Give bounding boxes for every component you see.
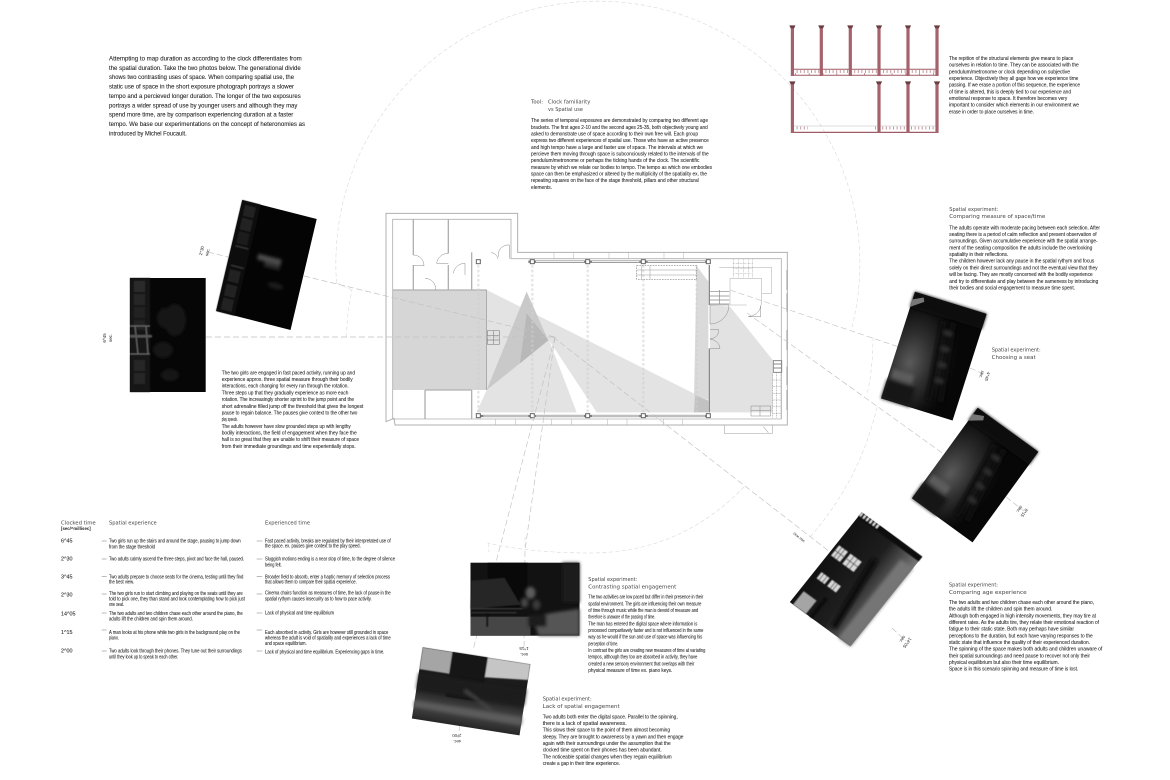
row: 14^05: Lack of physical and time equilibrium: [265, 610, 334, 616]
intro text block: the spatial duration. Take the two photos below. The generational divide: [109, 65, 301, 72]
row: 2^30 adults: being felt.: [265, 563, 282, 569]
row: 14^05: adults lift the children and spin them around.: [109, 616, 193, 622]
experiment text: lack of spatial engagement: there is a lack of spatial awareness.: [543, 721, 627, 727]
photo: 4^45 cinema seats: [881, 292, 987, 421]
row: 3^45: Broader field to absorb, enter a haptic memory of selection process: [265, 574, 390, 580]
experiment text: comparing age experience: different rates. As the adults tire, they relate their emotional reaction of: [949, 620, 1099, 626]
row: 1^15: Each absorbed in activity. Girls are however still grounded in space: [265, 630, 388, 636]
experiment text: lack of spatial engagement: clocked time spent on their phones has been abundant.: [543, 748, 662, 754]
experiment text: contrasting spatial engagement: way as he would if the sun and use of space was influencing his: [588, 635, 703, 641]
label: 2^00 sec: [452, 733, 462, 744]
floor plan: [386, 213, 787, 433]
experiment text: comparing measure of space/time: will be facing. They are mostly concerned with the bodily experience: [948, 272, 1093, 278]
label: 4^45 sec: sec.: [978, 370, 985, 379]
label: 6^45 sec: [102, 333, 113, 343]
experiment text: fast paced girls and slow adults: experience approx. three spatial measure through their bodily: [222, 377, 353, 383]
experiment text: fast paced girls and slow adults: play speeds.: [222, 417, 238, 423]
tool text block: repeating squares on the face of the stage threshold, pillars and other structural: [531, 178, 699, 184]
label: 8^15 sec: sec.: [1015, 505, 1024, 514]
label: 2^30 sec: sec.: [204, 248, 211, 257]
label: 1^15 sec: 1^15: [519, 646, 529, 651]
table: clocked time, spatial experience, experienced time: [61, 520, 395, 660]
experiment text: lack of spatial engagement: Lack of spatial engagement: [543, 704, 620, 710]
row: 6^45: from the stage threshold: [109, 544, 155, 550]
label: 14^05 sec: [897, 633, 913, 650]
tool text block: Tool:: [530, 100, 543, 106]
experiment text: comparing measure of space/time: spatiality in their reflections.: [949, 252, 1008, 258]
tool text block: percieve them moving through space is subconciously related to the intervals of the: [531, 152, 709, 158]
row: 2^30 adults: Sluggish motions ending is a near stop of time, to the degree of silence: [265, 557, 395, 563]
experiment text: lack of spatial engagement: This slows their space to the point of them almost becoming: [543, 728, 670, 734]
photo: 6^45 stage threshold: [130, 278, 206, 392]
experiment text: fast paced girls and slow adults: interactions, each changing for every run through the rotation.: [222, 384, 349, 390]
structural elements text block: passing. If we erase a portion of this sequence, the experience: [949, 83, 1080, 89]
label: 1^15 sec: [519, 646, 529, 657]
row: 2^30 girls: told to pick one, they than stand and look contemplating how to pick just: [109, 597, 245, 603]
row: 3^45: that allows them to compare their spatial experience.: [265, 580, 357, 586]
experiment text: contrasting spatial engagement: The two activities are low paced but differ in their presence in their: [588, 595, 703, 601]
experiment text: fast paced girls and slow adults: rotation. The increasingly shorter sprint to the jump point and the: [222, 397, 354, 403]
experiment text: comparing age experience: Although both engaged in high intensity movements, they may tire at: [949, 613, 1096, 619]
sight lines from centre to photographs: [206, 252, 1024, 738]
experiment text: comparing age experience: [949, 583, 1103, 673]
experiment heading: choosing a seat: Choosing a seat: [992, 355, 1036, 361]
experiment text: contrasting spatial engagement: perception of time.: [588, 641, 618, 647]
experiment text: comparing measure of space/time: seating there is a period of calm reflection and present observation of: [949, 232, 1097, 238]
label: 4^45 sec: 4^45: [983, 371, 991, 382]
colonnade elevation: full sequence: [789, 25, 940, 76]
photo: 2^30 stage seen at an angle: [216, 200, 317, 330]
experiment text: contrasting spatial engagement: processed comparitavely faster and is not influenced in the same: [588, 628, 703, 634]
row: 2^00: until they look up to speak to each other.: [109, 654, 178, 660]
row: 1^15: and space equilibrium.: [265, 641, 307, 647]
tool text block: Clock familiarity: [548, 100, 590, 106]
tool text block: [530, 100, 712, 191]
experiment text: comparing measure of space/time: Spatial experiment:: [949, 207, 999, 213]
tool text block: measure by which we relate our bodies to tempo. The tempo as which one embodies: [531, 165, 712, 171]
structural elements text block: of time is altered, this is deeply tied to our experience and: [949, 89, 1071, 95]
experiment text: contrasting spatial engagement: The man has entered the digital space where information is: [588, 621, 698, 627]
label: 1^15 sec: sec.: [520, 652, 528, 657]
row: 1^15: A man looks at his phone while two girls in the background play on the: [109, 630, 240, 636]
row: 1^15: whereas the adult is void of spatiality and experiences a lack of time: [264, 636, 391, 642]
experiment heading: choosing a seat: [992, 348, 1041, 361]
view cones: [393, 266, 773, 412]
experiment text: comparing measure of space/time: and try to differentiate and play between the sameness by introducing: [949, 279, 1098, 285]
experiment text: lack of spatial engagement: The noticeable spatial changes when they regain equilibrium: [543, 754, 672, 760]
row: 1^15: piano.: [109, 635, 119, 641]
tool text block: vs Spatial use: [548, 107, 583, 113]
photo: 2^00 digital space: [412, 647, 530, 735]
intro text block: spend more time, are by comparison experiencing duration at a faster: [109, 112, 294, 119]
structural elements text block: [949, 56, 1080, 115]
tool text block: and high tempo have a large and faster use of space. The intervals at which we: [531, 145, 703, 151]
row: 14^05: [61, 610, 334, 622]
row: 1^15: [61, 630, 391, 647]
row: 1^15: 1^15: [61, 630, 73, 636]
row: 2^00: [61, 649, 384, 660]
table headings: Spatial experience: [109, 520, 157, 526]
row: 6^45: 6^45: [61, 538, 73, 544]
experiment text: comparing measure of space/time: surroundings. Given accumulative experience with the spatial arrange-: [949, 239, 1098, 245]
stairs and doors: [487, 259, 782, 418]
row: 3^45: 3^45: [61, 574, 73, 580]
dashed time arcs: [336, 1, 877, 553]
experiment text: lack of spatial engagement: [543, 697, 683, 767]
experiment text: contrasting spatial engagement: spatial environment. The girls are influencing their own measure: [588, 601, 701, 607]
row: 2^00: Lack of physical and time equilibrium. Experiencing gaps in time.: [265, 649, 384, 655]
tool text block: space can then be emphasized or altered by the multiplicity of the spatiality ex. the: [531, 172, 707, 178]
row: 2^30 adults: 2^30: [61, 557, 73, 563]
experiment text: lack of spatial engagement: again with their surroundings under the assumption that the: [543, 741, 671, 747]
experiment text: comparing measure of space/time: The adults operate with moderate pacing between each selection. After: [949, 225, 1100, 231]
experiment text: fast paced girls and slow adults: pause to regain balance. The pauses give context to the other two: [222, 410, 357, 416]
experiment text: comparing age experience: the adults lift the children and spin them around.: [949, 607, 1052, 613]
label: 6^45 sec: sec.: [108, 334, 113, 342]
structural elements text block: experience. Objectively they all gage how we experience time: [949, 76, 1078, 82]
row: 2^30 adults: Two adults calmly ascend the three steps, pivot and face the hall, paused.: [109, 557, 244, 563]
experiment text: comparing measure of space/time: ment of the seating composition the adults include the overlooking: [949, 245, 1092, 251]
label: 2^00 sec: 2^00: [452, 733, 462, 738]
experiment text: contrasting spatial engagement: Contrasting spatial engagement: [588, 584, 676, 590]
experiment heading: choosing a seat: Spatial experiment:: [992, 348, 1041, 354]
row: 3^45: Two adults prepare to choose seats for the cinema, testing until they find: [109, 574, 243, 580]
table headings: [sec/^millisec]: [61, 526, 91, 531]
experiment text: lack of spatial engagement: sleepy. They are brought to awareness by a yawn and then engage: [543, 734, 683, 740]
label: 4^45 sec: [978, 369, 991, 382]
intro text block: tempo. We base our experimentations on the concept of heteronomies as: [109, 121, 306, 128]
experiment text: contrasting spatial engagement: physical measure of time ex. piano keys.: [588, 668, 672, 674]
label: 14^05 sec: sec.: [898, 635, 907, 644]
experiment text: contrasting spatial engagement: In contrast the girls are creating new measures of time at variating: [588, 648, 705, 654]
intro text block: Attempting to map duration as according to the clock differentiates from: [109, 56, 302, 62]
columns and beams: [476, 260, 710, 418]
structural elements text block: important to consider which elements in our environment we: [949, 103, 1079, 109]
row: 3^45: [61, 574, 390, 586]
row: 3^45: the best view.: [109, 579, 134, 585]
experiment text: comparing age experience: physical equilibrium but also their time equilibrium.: [949, 660, 1059, 666]
photo: 8^15 cinema seats closer: [912, 408, 1038, 542]
row: 2^30 girls: spatial rythym causes insecurity as to how to pace activity.: [265, 597, 372, 603]
experiment text: comparing measure of space/time: solely on their direct surroundings and not the eventual view that they: [949, 265, 1098, 271]
label: 2^30 sec: 2^30: [198, 245, 205, 256]
row: 14^05: The two adults and two children chase each other around the piano, the: [109, 611, 243, 617]
label: 6^45 sec: 6^45: [102, 333, 107, 343]
label: 2^30 sec: [198, 245, 211, 257]
experiment text: comparing age experience: Space is in this scenario spinning and measure of time is lost.: [949, 667, 1078, 673]
experiment text: fast paced girls and slow adults: from their immediate groundings and time experientially stops.: [222, 444, 356, 450]
experiment text: contrasting spatial engagement: created a new sensory environment that overlaps with their: [588, 661, 694, 667]
intro text block: static use of space in the short exposure photograph portrays a slower: [109, 84, 295, 91]
experiment text: lack of spatial engagement: create a gap in their time experience.: [543, 761, 620, 767]
experiment text: comparing age experience: Spatial experiment:: [949, 583, 998, 589]
row: 2^30 girls: Cinema chairs function as measures of time, the lack of pause in the: [265, 591, 391, 597]
intro text block: portrays a wider spread of use by younger users and although they may: [109, 102, 298, 109]
photo: 1^15 piano and phone: [470, 563, 580, 636]
experiment text: lack of spatial engagement: Two adults both enter the digital space. Parallel to the spinning,: [543, 714, 678, 720]
table headings: Experienced time: [265, 520, 310, 526]
label: 8^15 sec: 8^15: [1019, 508, 1029, 519]
experiment text: comparing age experience: their spatial surroundings and need pause to recover not only their: [949, 653, 1090, 659]
experiment text: comparing age experience: static state that influence the quality of their experienced duration.: [949, 640, 1090, 646]
label: 14^05 sec: 14^05: [902, 637, 913, 650]
tool text block: pendulum/metronome or perhaps the ticking hands of the clock. The scientific: [531, 158, 700, 164]
row: 2^30 girls: The two girls run to start climbing and playing on the seats until they are: [109, 591, 243, 597]
experiment text: fast paced girls and slow adults: hall is so great that they are unable to shift their measure of space: [222, 437, 359, 443]
intro text block: tempo and a percieved longer duration. The longer of the two exposures: [109, 93, 301, 100]
photo: 14^05 spinning hall: [790, 512, 922, 647]
structural elements text block: The repition of the structural elements give means to place: [949, 56, 1073, 62]
row: 6^45: Two girls run up the stairs and around the stage, pausing to jump down: [109, 539, 241, 545]
experiment text: comparing measure of space/time: Comparing measure of space/time: [949, 214, 1045, 220]
intro text block: [109, 56, 306, 138]
tool text block: asked to demonstrate use of space according to their own free will. Each group: [531, 132, 698, 138]
experiment text: comparing measure of space/time: The children however lack any pause in the spatial rythym and focus: [949, 259, 1095, 265]
row: 2^30 girls: 2^30: [61, 593, 73, 599]
row: 6^45: the space. ex. pauses give context to the play speed.: [265, 544, 361, 550]
experiment text: comparing age experience: perceptions to the duration, but each have varying responses to the: [949, 633, 1093, 639]
experiment text: fast paced girls and slow adults: [222, 370, 364, 450]
row: 6^45: [61, 538, 391, 550]
tool text block: The series of temporal exposures are demonstrated by comparing two different age: [531, 118, 708, 124]
experiment text: fast paced girls and slow adults: The adults however have slow grounded steps up with lengthy: [222, 424, 351, 430]
experiment text: contrasting spatial engagement: of time through music while the man is devoid of measure and: [588, 608, 698, 614]
row: 2^30 girls: one seat.: [109, 602, 124, 608]
experiment text: comparing measure of space/time: their bodies and social engagement to measure time spent.: [949, 285, 1075, 291]
colonnade elevation: erased sequence: [789, 81, 940, 133]
experiment text: fast paced girls and slow adults: The two girls are engaged in fast paced activity, running up and: [222, 370, 355, 376]
experiment text: comparing age experience: The spinning of the space makes both adults and children unaware of: [949, 647, 1103, 653]
structural elements text block: emotional response to space. It therefore becomes very: [949, 96, 1068, 102]
sight lines from centre to photographs: One min: [792, 532, 806, 543]
experiment text: comparing age experience: Comparing age experience: [949, 590, 1027, 596]
experiment text: contrasting spatial engagement: therefore is unaware of the passing of time.: [588, 615, 655, 621]
experiment text: fast paced girls and slow adults: bodily interactions, the field of engagement when they face the: [222, 430, 357, 436]
table headings: Clocked time: [61, 520, 96, 526]
intro text block: shows two contrasting uses of space. When comparing spatial use, the: [109, 74, 294, 81]
experiment text: fast paced girls and slow adults: short adrenaline filled jump off the threshold that gives the longest: [222, 404, 364, 410]
experiment text: lack of spatial engagement: Spatial experiment:: [543, 697, 592, 703]
structural elements text block: pendulum/metronome or clock depending on subjective: [949, 69, 1070, 75]
experiment text: contrasting spatial engagement: Spatial experiment:: [588, 577, 638, 583]
row: 2^30 girls: [61, 591, 391, 608]
experiment text: comparing measure of space/time: [948, 207, 1100, 291]
experiment text: comparing age experience: The two adults and two children chase each other around the piano,: [949, 600, 1094, 606]
table headings: [61, 520, 310, 531]
label: 8^15 sec: [1014, 504, 1029, 519]
structural elements text block: ourselves in relation to time. They can be associated with the: [949, 63, 1079, 69]
row: 2^30 adults: [61, 557, 395, 569]
experiment text: fast paced girls and slow adults: Three steps up that they gradually experience as more each: [222, 390, 348, 396]
tool text block: brackets. The first ages 2-10 and the second ages 25-35, both objectively young and: [531, 125, 708, 131]
experiment text: comparing age experience: fatigue to their static state. Both may perhaps have similar: [949, 627, 1074, 633]
row: 14^05: 14^05: [61, 612, 76, 618]
intro text block: introduced by Michel Foucault.: [109, 130, 187, 138]
row: 6^45: Fast paced activity, breaks are regulated by their interpretated use of: [265, 538, 391, 544]
tool text block: express two different experiences of spatial use. Those who have an active presence: [531, 138, 709, 144]
experiment text: contrasting spatial engagement: [588, 577, 705, 674]
structural elements text block: erase in order to place ourselves in time.: [949, 109, 1034, 115]
experiment text: contrasting spatial engagement: tempos, although they too are absorbed in activity, they have: [588, 655, 697, 661]
label: 2^00 sec: sec.: [453, 739, 461, 744]
row: 2^00: 2^00: [61, 649, 73, 655]
tool text block: elements.: [531, 185, 552, 191]
walls: [386, 213, 787, 433]
row: 2^00: Two adults look through their phones. They tune out their surroundings: [109, 649, 242, 655]
